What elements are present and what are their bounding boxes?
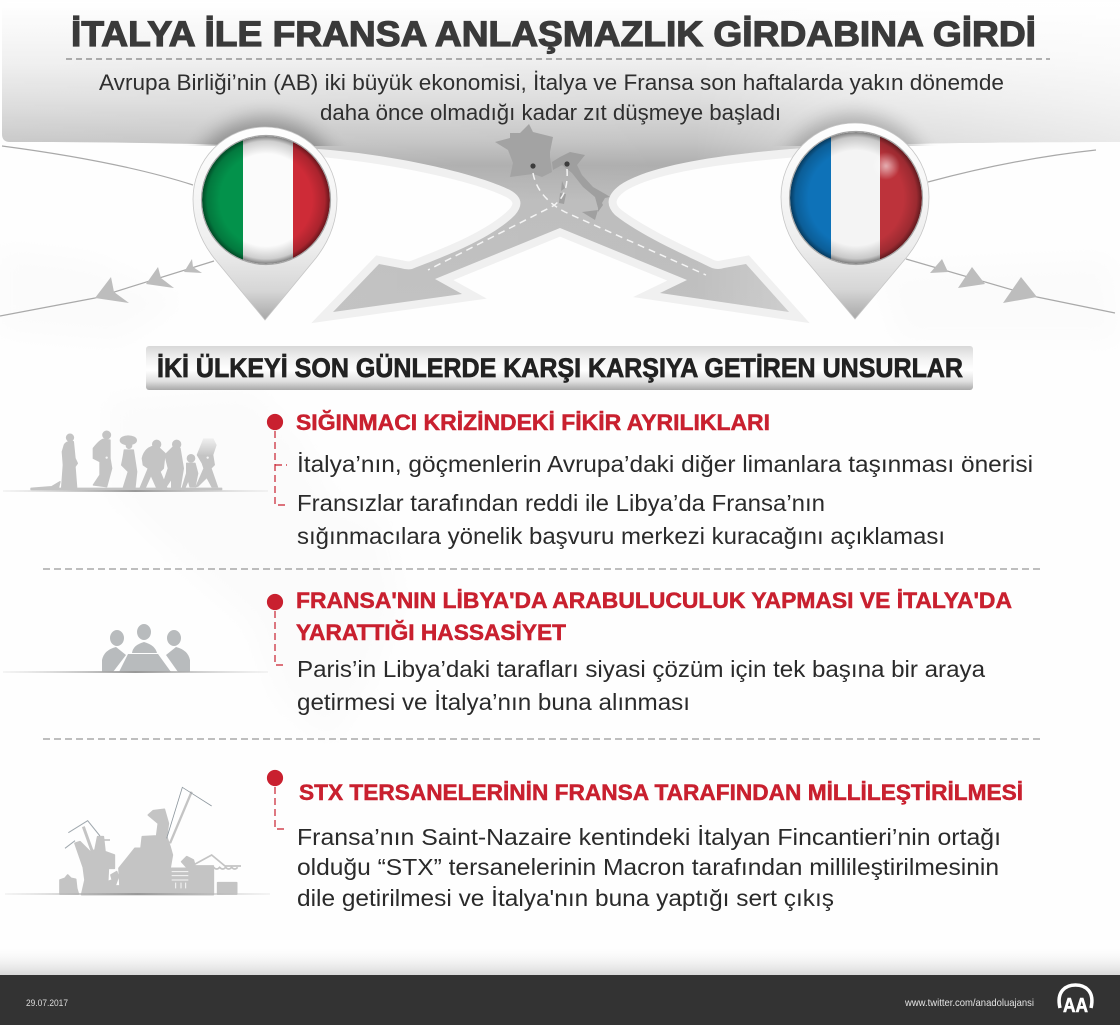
top panel with diverging arrows [2, 2, 1120, 312]
route dots [530, 161, 570, 169]
subtitle [99, 70, 1004, 125]
pin: France flag [777, 114, 933, 319]
title: İTALYA İLE FRANSA ANLAŞMAZLIK GİRDABINA GİRDİ [71, 15, 1036, 54]
footer [0, 975, 1120, 1025]
icon: refugees [3, 431, 268, 492]
item 1 text: İtalya’nın, göçmenlerin Avrupa’daki diğer limanlara taşınması önerisi [297, 451, 1033, 477]
subtitle: daha önce olmadığı kadar zıt düşmeye başladı [320, 100, 781, 125]
section heading [146, 346, 973, 390]
logo: AA: AA [1063, 995, 1088, 1017]
item 1 text: Fransızlar tarafından reddi ile Libya’da Fransa’nın [297, 490, 825, 516]
item 2 text: Paris’in Libya’daki tarafları siyasi çözüm için tek başına bir araya [297, 656, 985, 682]
item 1 heading: SIĞINMACI KRİZİNDEKİ FİKİR AYRILIKLARI [296, 410, 770, 435]
item 1 text [297, 451, 1033, 549]
item 3 text: dile getirilmesi ve İtalya'nın buna yaptığı sert çıkış [297, 885, 834, 911]
logo: AA [1059, 985, 1092, 1017]
item 2 heading [296, 588, 1012, 645]
item 2 heading: FRANSA'NIN LİBYA'DA ARABULUCULUK YAPMASI VE İTALYA'DA [296, 588, 1012, 613]
plane trail right [906, 150, 1115, 313]
plane trail left [0, 146, 214, 316]
item 3 heading: STX TERSANELERİNİN FRANSA TARAFINDAN MİLLİLEŞTİRİLMESİ [299, 780, 1023, 805]
icon: meeting [3, 624, 268, 673]
item 3 text: olduğu “STX” tersanelerinin Macron tarafından millileştirilmesinin [297, 854, 999, 880]
item 3 marker [268, 770, 285, 829]
item 2 heading: YARATTIĞI HASSASİYET [296, 620, 567, 645]
France [495, 124, 553, 177]
item 2 text: getirmesi ve İtalya’nın buna alınması [297, 689, 690, 715]
item 2 marker [268, 594, 286, 665]
section heading: İKİ ÜLKEYİ SON GÜNLERDE KARŞI KARŞIYA GETİREN UNSURLAR [157, 353, 963, 383]
pin: Italy flag [187, 117, 343, 320]
map: France and Italy [428, 124, 706, 275]
date: 29.07.2017 [26, 998, 68, 1009]
item 2 text [297, 656, 985, 715]
item 1 text: sığınmacılara yönelik başvuru merkezi kuracağını açıklaması [297, 523, 945, 549]
subtitle: Avrupa Birliği’nin (AB) iki büyük ekonomisi, İtalya ve Fransa son haftalarda yakın dönemde [99, 70, 1004, 95]
item 3 text [297, 824, 1001, 911]
islands [559, 181, 598, 220]
item 3 text: Fransa’nın Saint-Nazaire kentindeki İtalyan Fincantieri’nin ortağı [297, 824, 1001, 850]
Italy [552, 152, 610, 212]
social link: www.twitter.com/anadoluajansi [904, 997, 1034, 1009]
dashed routes [428, 169, 706, 275]
icon: shipyard [5, 787, 270, 895]
item 1 marker [268, 414, 287, 505]
